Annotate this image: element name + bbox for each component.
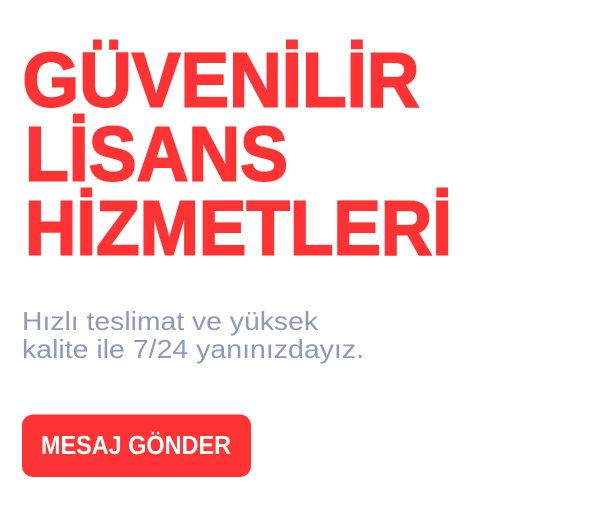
title	[22, 38, 452, 272]
subtitle text	[22, 306, 364, 364]
subtitle text: Hızlı teslimat ve yüksek	[22, 306, 319, 336]
button: mesaj gönder: MESAJ GÖNDER	[41, 431, 231, 460]
button: mesaj gönder	[22, 414, 251, 477]
subtitle text: kalite ile 7/24 yanınızdayız.	[22, 334, 364, 364]
title: LİSANS	[25, 112, 288, 198]
title: HİZMETLERİ	[25, 186, 452, 272]
title: GÜVENİLİR	[22, 38, 420, 124]
